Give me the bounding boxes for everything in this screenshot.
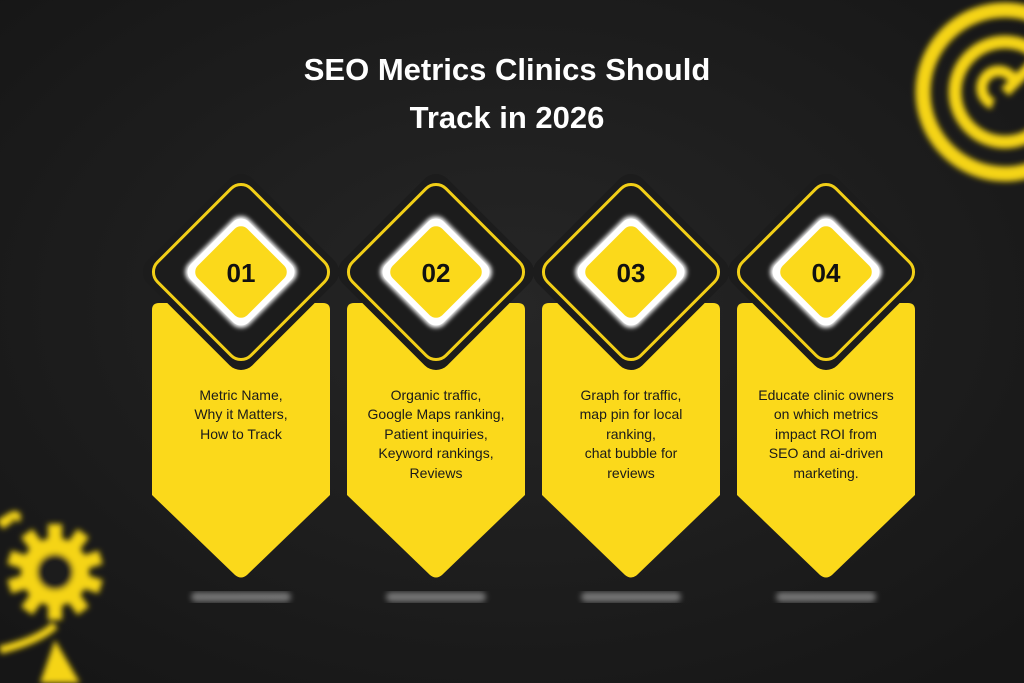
text 03: chat bubble for (585, 445, 678, 461)
text 01: Metric Name, (199, 387, 283, 403)
title: SEO Metrics Clinics Should (304, 52, 710, 87)
text 04: on which metrics (774, 406, 878, 422)
text 02 (368, 387, 504, 481)
panel: 02 (331, 167, 541, 602)
text 03: map pin for local (580, 406, 682, 422)
text 04: SEO and ai-driven (769, 445, 883, 461)
panel: 01 (136, 167, 346, 602)
title: Track in 2026 (410, 100, 604, 135)
text 04: Educate clinic owners (758, 387, 894, 403)
text 02: Organic traffic, (391, 387, 481, 403)
text 04: impact ROI from (775, 426, 877, 442)
title (304, 52, 710, 135)
text 01: How to Track (200, 426, 283, 442)
text 02: Keyword rankings, (378, 445, 494, 461)
text 03 (580, 387, 682, 481)
text 03: Graph for traffic, (581, 387, 681, 403)
panel: 03 (526, 167, 736, 602)
icon: gear (0, 516, 103, 683)
text 04 (758, 387, 894, 481)
text 03: reviews (607, 465, 655, 481)
text 03: ranking, (606, 426, 656, 442)
text 02: Google Maps ranking, (368, 406, 504, 422)
text 04: marketing. (793, 465, 859, 481)
text 02: Patient inquiries, (384, 426, 488, 442)
text 01: Why it Matters, (194, 406, 288, 422)
text 02: Reviews (410, 465, 462, 481)
number 03: 03 (617, 258, 645, 288)
panel: 04 (721, 167, 931, 602)
icon: target (923, 10, 1024, 174)
number 02: 02 (422, 258, 450, 288)
text 01 (194, 387, 288, 442)
number 01: 01 (227, 258, 255, 288)
number 04: 04 (812, 258, 841, 288)
